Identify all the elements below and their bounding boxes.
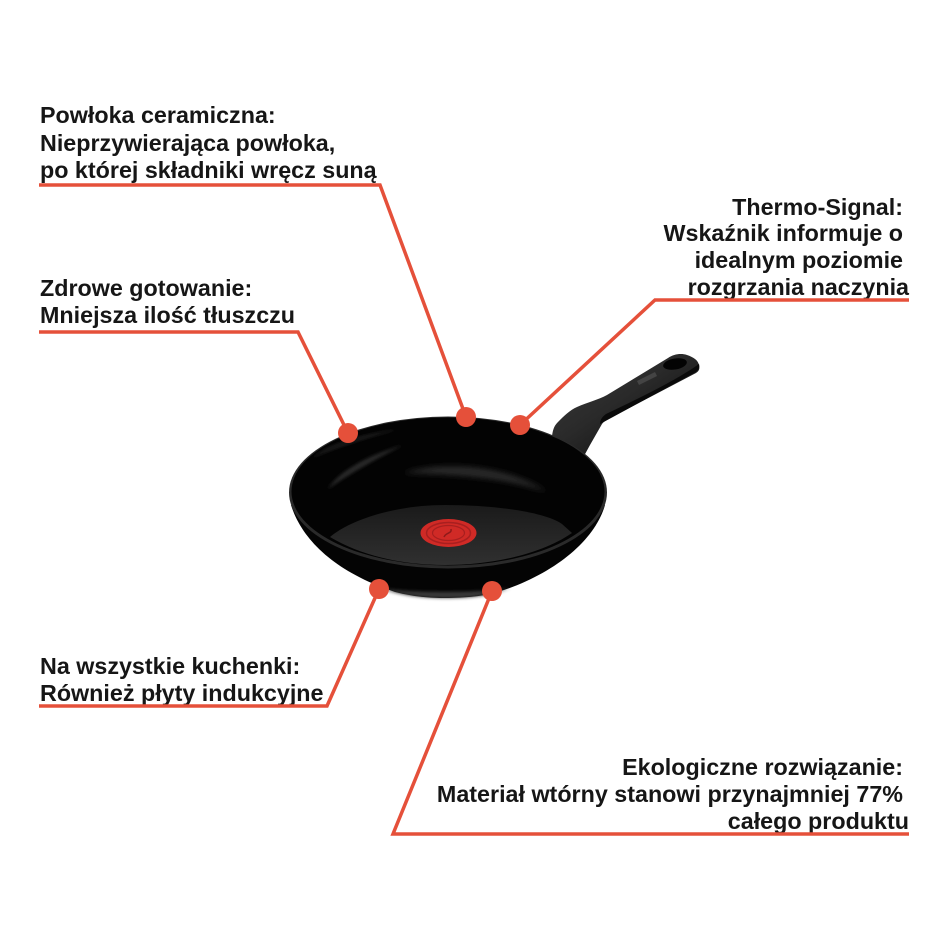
pan outer body bbox=[291, 505, 605, 598]
callout: Zdrowe gotowanie bbox=[39, 275, 358, 443]
callout text: Na wszystkie kuchenki: Również płyty indukcyjne bbox=[40, 680, 324, 706]
callout text: Thermo-Signal: rozgrzania naczynia bbox=[688, 274, 910, 300]
marker dot: Powłoka ceramiczna bbox=[456, 407, 476, 427]
pan interior bbox=[292, 418, 604, 566]
pan rim bbox=[289, 416, 607, 568]
leader line: Zdrowe gotowanie bbox=[39, 332, 348, 433]
marker dot: Ekologiczne rozwiązanie bbox=[482, 581, 502, 601]
callout: Na wszystkie kuchenki bbox=[39, 579, 389, 706]
callout text: Ekologiczne rozwiązanie: Ekologiczne rozwiązanie: bbox=[622, 754, 903, 780]
callout text: Thermo-Signal: Thermo-Signal: bbox=[732, 194, 903, 220]
callout text: Zdrowe gotowanie: Mniejsza ilość tłuszczu bbox=[40, 302, 295, 328]
leader line: Powłoka ceramiczna bbox=[39, 185, 466, 417]
callout text: Thermo-Signal: Wskaźnik informuje o bbox=[664, 220, 903, 246]
callout text: Powłoka ceramiczna: Powłoka ceramiczna: bbox=[40, 102, 276, 128]
callout text: Thermo-Signal: idealnym poziomie bbox=[695, 247, 903, 273]
pan cooking surface bbox=[330, 505, 572, 565]
interior reflections bbox=[312, 429, 547, 492]
callout text: Ekologiczne rozwiązanie: całego produktu bbox=[728, 808, 909, 834]
callout: Thermo-Signal bbox=[510, 194, 910, 435]
marker dot: Zdrowe gotowanie bbox=[338, 423, 358, 443]
pan handle bbox=[552, 354, 699, 456]
callout: Ekologiczne rozwiązanie bbox=[393, 581, 909, 834]
callout text: Powłoka ceramiczna: Nieprzywierająca powłoka, bbox=[40, 130, 335, 156]
marker dot: Na wszystkie kuchenki bbox=[369, 579, 389, 599]
callout text: Zdrowe gotowanie: Zdrowe gotowanie: bbox=[40, 275, 252, 301]
base highlight bbox=[378, 587, 510, 598]
marker dot: Thermo-Signal bbox=[510, 415, 530, 435]
callout text: Powłoka ceramiczna: po której składniki wręcz suną bbox=[40, 157, 378, 183]
frying pan illustration bbox=[289, 354, 699, 598]
icon: thermo-signal indicator bbox=[420, 519, 476, 547]
callout text: Na wszystkie kuchenki: Na wszystkie kuchenki: bbox=[40, 653, 300, 679]
leader line: Thermo-Signal bbox=[520, 300, 909, 425]
callout text: Ekologiczne rozwiązanie: Materiał wtórny stanowi przynajmniej 77% bbox=[437, 781, 903, 807]
leader line: Ekologiczne rozwiązanie bbox=[393, 591, 909, 834]
leader line: Na wszystkie kuchenki bbox=[39, 589, 379, 706]
callout: Powłoka ceramiczna bbox=[39, 102, 476, 427]
